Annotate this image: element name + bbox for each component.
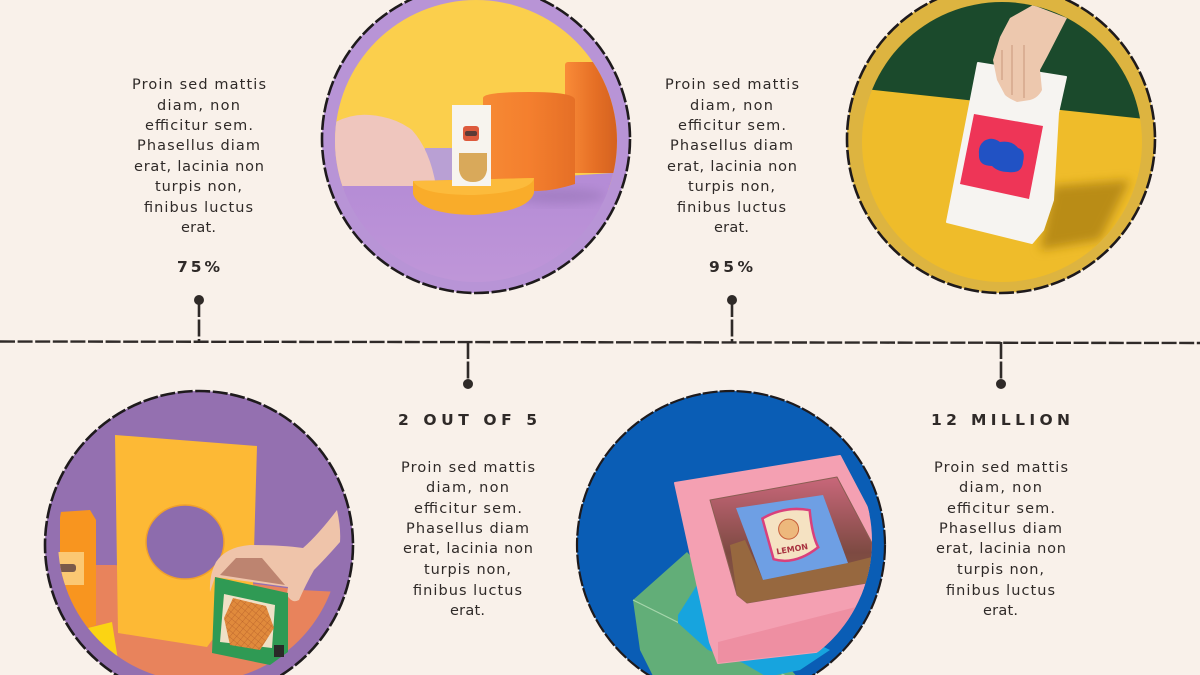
green box bbox=[633, 552, 800, 675]
panel hole bbox=[146, 505, 224, 579]
text block: 75%: 75% bbox=[177, 258, 220, 276]
text block: 12 million: efficitur sem. bbox=[947, 501, 1055, 517]
photo circle: white coffee bag held by hand bbox=[847, 0, 1155, 295]
text block: 95%: erat. bbox=[714, 220, 749, 236]
text block: 95%: diam, non bbox=[690, 98, 773, 114]
text block: 2 out of 5 bbox=[398, 411, 537, 619]
text block: 75% bbox=[132, 77, 266, 276]
timeline axis bbox=[0, 342, 1200, 343]
yellow block bbox=[88, 622, 118, 656]
text block: 2 out of 5: erat. bbox=[450, 603, 485, 619]
text block: 95%: Proin sed mattis bbox=[665, 77, 799, 93]
text block: 12 million: diam, non bbox=[959, 480, 1042, 496]
marker: 12 million bbox=[996, 342, 1006, 389]
text block: 12 million: Proin sed mattis bbox=[934, 460, 1068, 476]
photo circle: yellow panel and green box with waffle bbox=[45, 391, 353, 675]
text block: 75%: diam, non bbox=[157, 98, 240, 114]
bag shadow bbox=[1040, 180, 1130, 250]
text block: 95%: 95% bbox=[709, 258, 753, 276]
product box bbox=[452, 105, 491, 186]
photo circle: pink window box on blue bbox=[577, 391, 885, 675]
text block: 2 out of 5: diam, non bbox=[426, 480, 509, 496]
text block: 2 out of 5: Proin sed mattis bbox=[401, 460, 535, 476]
text block: 12 million bbox=[931, 411, 1070, 619]
pink arch bbox=[330, 115, 436, 186]
window bbox=[710, 477, 880, 603]
text block: 95%: erat, lacinia non bbox=[667, 159, 797, 175]
yellow panel bbox=[115, 435, 257, 647]
lemon badge: LEMON bbox=[776, 542, 809, 557]
pink box bbox=[675, 456, 880, 663]
back floor patch bbox=[425, 148, 452, 180]
salmon floor bbox=[55, 565, 340, 675]
orange box bbox=[60, 510, 96, 640]
text block: 12 million: 12 MILLION bbox=[931, 411, 1070, 429]
blue blob bbox=[979, 139, 1024, 172]
text block: 75%: efficitur sem. bbox=[145, 118, 253, 134]
disc shadow bbox=[528, 188, 600, 204]
white bag bbox=[947, 63, 1066, 243]
dark green wall bbox=[855, 0, 1145, 119]
text block: 2 out of 5: efficitur sem. bbox=[414, 501, 522, 517]
lemon badge bbox=[762, 505, 820, 564]
red label bbox=[960, 114, 1043, 199]
blue card bbox=[736, 495, 848, 580]
waffle bbox=[224, 598, 274, 650]
text block: 75%: Proin sed mattis bbox=[132, 77, 266, 93]
orange cylinder bbox=[483, 92, 575, 191]
tall orange cylinder bbox=[565, 62, 620, 173]
text block: 12 million: turpis non, bbox=[957, 562, 1044, 578]
text block: 2 out of 5: finibus luctus bbox=[413, 583, 522, 599]
text block: 95%: turpis non, bbox=[688, 179, 775, 195]
cyan box bbox=[678, 585, 830, 675]
text block: 75%: turpis non, bbox=[155, 179, 242, 195]
hand bbox=[210, 510, 340, 601]
text block: 95%: Phasellus diam bbox=[670, 138, 793, 154]
text block: 12 million: finibus luctus bbox=[946, 583, 1055, 599]
text block: 75%: erat, lacinia non bbox=[134, 159, 264, 175]
text block: 12 million: erat. bbox=[983, 603, 1018, 619]
text block: 2 out of 5: 2 OUT OF 5 bbox=[398, 411, 537, 429]
text block: 95%: efficitur sem. bbox=[678, 118, 786, 134]
text block: 2 out of 5: erat, lacinia non bbox=[403, 541, 533, 557]
text block: 95% bbox=[665, 77, 799, 276]
text block: 75%: finibus luctus bbox=[144, 200, 253, 216]
text block: 2 out of 5: Phasellus diam bbox=[406, 521, 529, 537]
text block: 2 out of 5: turpis non, bbox=[424, 562, 511, 578]
hand bbox=[993, 5, 1067, 102]
yellow half disc bbox=[413, 178, 534, 215]
marker: 2 out of 5 bbox=[463, 342, 473, 389]
photo circle: purple and yellow packaging scene bbox=[322, 0, 630, 293]
text block: 12 million: erat, lacinia non bbox=[936, 541, 1066, 557]
text block: 75%: erat. bbox=[181, 220, 216, 236]
text block: 75%: Phasellus diam bbox=[137, 138, 260, 154]
text block: 95%: finibus luctus bbox=[677, 200, 786, 216]
marker: 75% bbox=[194, 295, 204, 342]
green box bbox=[212, 577, 288, 665]
text block: 12 million: Phasellus diam bbox=[939, 521, 1062, 537]
floor bbox=[342, 173, 614, 190]
marker: 95% bbox=[727, 295, 737, 342]
